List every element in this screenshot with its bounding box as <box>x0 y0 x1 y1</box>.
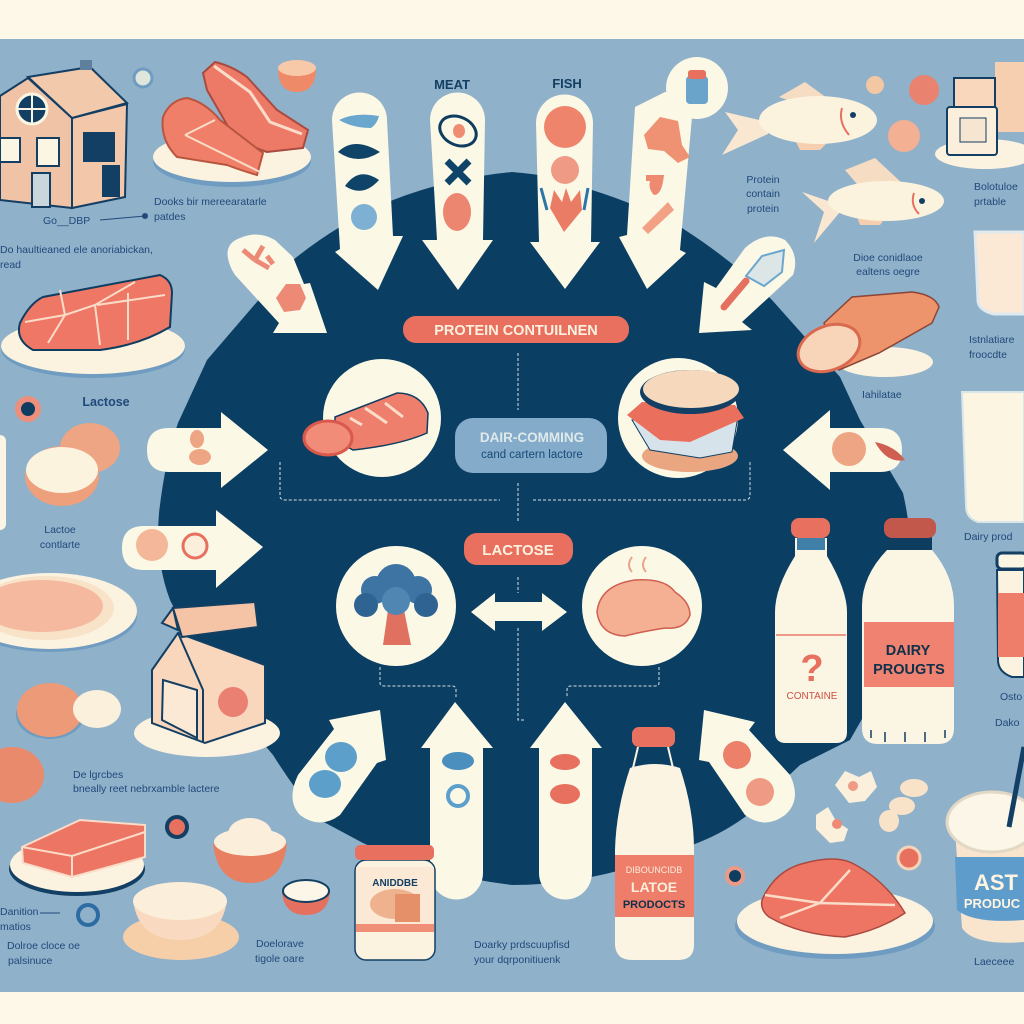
right side dairy bottles: CONTAINE <box>787 691 838 702</box>
eggs: contlarte <box>40 539 80 551</box>
center milk bottle <box>615 727 694 960</box>
right side dairy bottles <box>775 518 954 744</box>
text: jar caption: your dqrponitiuenk <box>474 954 561 966</box>
right jar: Dako <box>995 717 1020 729</box>
right side dairy bottles: DAIRY <box>886 643 931 659</box>
bread roll plate: Iahilatae <box>862 389 902 401</box>
gear icon top left <box>134 69 152 87</box>
text: left captions: read <box>0 259 21 271</box>
cooked meat circle <box>582 546 702 666</box>
bread roll plate <box>791 292 939 401</box>
text: left captions <box>0 196 267 271</box>
steak circle <box>304 359 441 477</box>
text: lower left caption: De lgrcbes <box>73 769 123 781</box>
glass of milk right <box>962 392 1024 543</box>
heading: lactose: LACTOSE <box>482 542 554 559</box>
house illustration <box>0 60 148 227</box>
center milk bottle: PRODOCTS <box>623 899 685 911</box>
side arrow icons left <box>136 430 211 561</box>
eggs <box>0 399 120 551</box>
bottom arrows <box>292 702 795 900</box>
text: fish captions: ealtens oegre <box>856 266 920 278</box>
top right dairy items <box>935 62 1024 208</box>
text: left captions: Dooks bir mereearatarle <box>154 196 267 208</box>
heading: protein: PROTEIN CONTUILNEN <box>434 323 598 339</box>
tuna steak plate <box>9 817 187 896</box>
side arrows left <box>122 412 268 588</box>
text: lower left caption <box>73 769 220 795</box>
jar: ANIDDBE <box>372 878 418 889</box>
small dish <box>278 60 316 92</box>
burger circle <box>618 358 744 478</box>
bottom arrow icons <box>309 741 774 806</box>
top right dairy items: Bolotuloe <box>974 181 1018 193</box>
top arrows <box>228 92 795 333</box>
milk carton on plate <box>134 602 280 757</box>
lactose label left: Lactose <box>82 395 130 409</box>
house illustration: Go__DBP <box>43 215 90 227</box>
text: bottom left captions: Dolroe cloce oe <box>7 940 80 952</box>
text: bottom left captions: matios <box>0 921 31 933</box>
double arrow between circles <box>471 593 567 631</box>
center label dairy <box>455 418 607 473</box>
text: bottom left captions: Doelorave <box>256 938 304 950</box>
text: fish captions <box>746 174 923 278</box>
text: lower left caption: bneally reet nebrxamble lactere <box>73 783 220 795</box>
bottom right steak plate <box>735 859 935 959</box>
glass of milk upper right: froocdte <box>969 349 1007 361</box>
top right fish <box>722 75 944 243</box>
right side dairy bottles: ? <box>800 648 824 690</box>
text: left captions: Do haultieaned ele anoriabickan, <box>0 244 153 256</box>
right jar: Osto <box>1000 691 1022 703</box>
heading: lactose <box>464 533 573 565</box>
text: jar caption <box>474 939 570 966</box>
center milk bottle: DIBOUNCIDB <box>626 865 682 875</box>
connector lines <box>280 353 750 720</box>
side arrow right <box>783 410 902 490</box>
text: fish captions: Dioe conidlaoe <box>853 252 923 264</box>
top arrow icons <box>243 106 784 312</box>
rice plate <box>0 573 137 652</box>
text: bottom left captions: palsinuce <box>8 955 53 967</box>
glass of milk upper right: Istnlatiare <box>969 334 1015 346</box>
jar <box>355 845 435 960</box>
side arrow icons right <box>832 432 905 466</box>
top left meat plate <box>153 62 311 187</box>
small white foods and icons <box>727 771 928 884</box>
heading: protein <box>403 316 629 343</box>
yogurt tub <box>947 747 1024 968</box>
top labels: MEAT <box>434 77 470 92</box>
text: jar caption: Doarky prdscuupfisd <box>474 939 570 951</box>
top labels: FISH <box>552 76 582 91</box>
right side dairy bottles: PROUGTS <box>873 662 945 678</box>
broccoli circle <box>336 546 456 666</box>
text: bottom left captions: tigole oare <box>255 953 304 965</box>
large steak plate <box>1 275 185 378</box>
text: bottom left captions: Danition <box>0 906 39 918</box>
central navy circle <box>158 172 911 885</box>
small jar circle <box>666 57 728 119</box>
glass of milk upper right <box>969 232 1024 361</box>
right jar <box>995 553 1024 729</box>
eggs and popcorn <box>0 683 121 803</box>
text: bottom left captions <box>0 905 304 967</box>
bowls <box>123 818 330 960</box>
center label dairy: DAIR-COMMING <box>480 430 584 445</box>
text: fish captions: contain <box>746 188 780 200</box>
center milk bottle: LATOE <box>631 879 677 895</box>
top right dairy items: prtable <box>974 196 1006 208</box>
top labels <box>434 76 582 92</box>
text: left captions: patdes <box>154 211 186 223</box>
eggs: Lactoe <box>44 524 76 536</box>
yogurt tub: PRODUC <box>964 896 1021 911</box>
center label dairy: cand cartern lactore <box>481 449 583 461</box>
text: fish captions: Protein <box>746 174 780 186</box>
text: fish captions: protein <box>747 203 779 215</box>
glass of milk right: Dairy prod <box>964 531 1013 543</box>
yogurt tub: Laeceee <box>974 956 1014 968</box>
yogurt tub: AST <box>974 870 1019 895</box>
